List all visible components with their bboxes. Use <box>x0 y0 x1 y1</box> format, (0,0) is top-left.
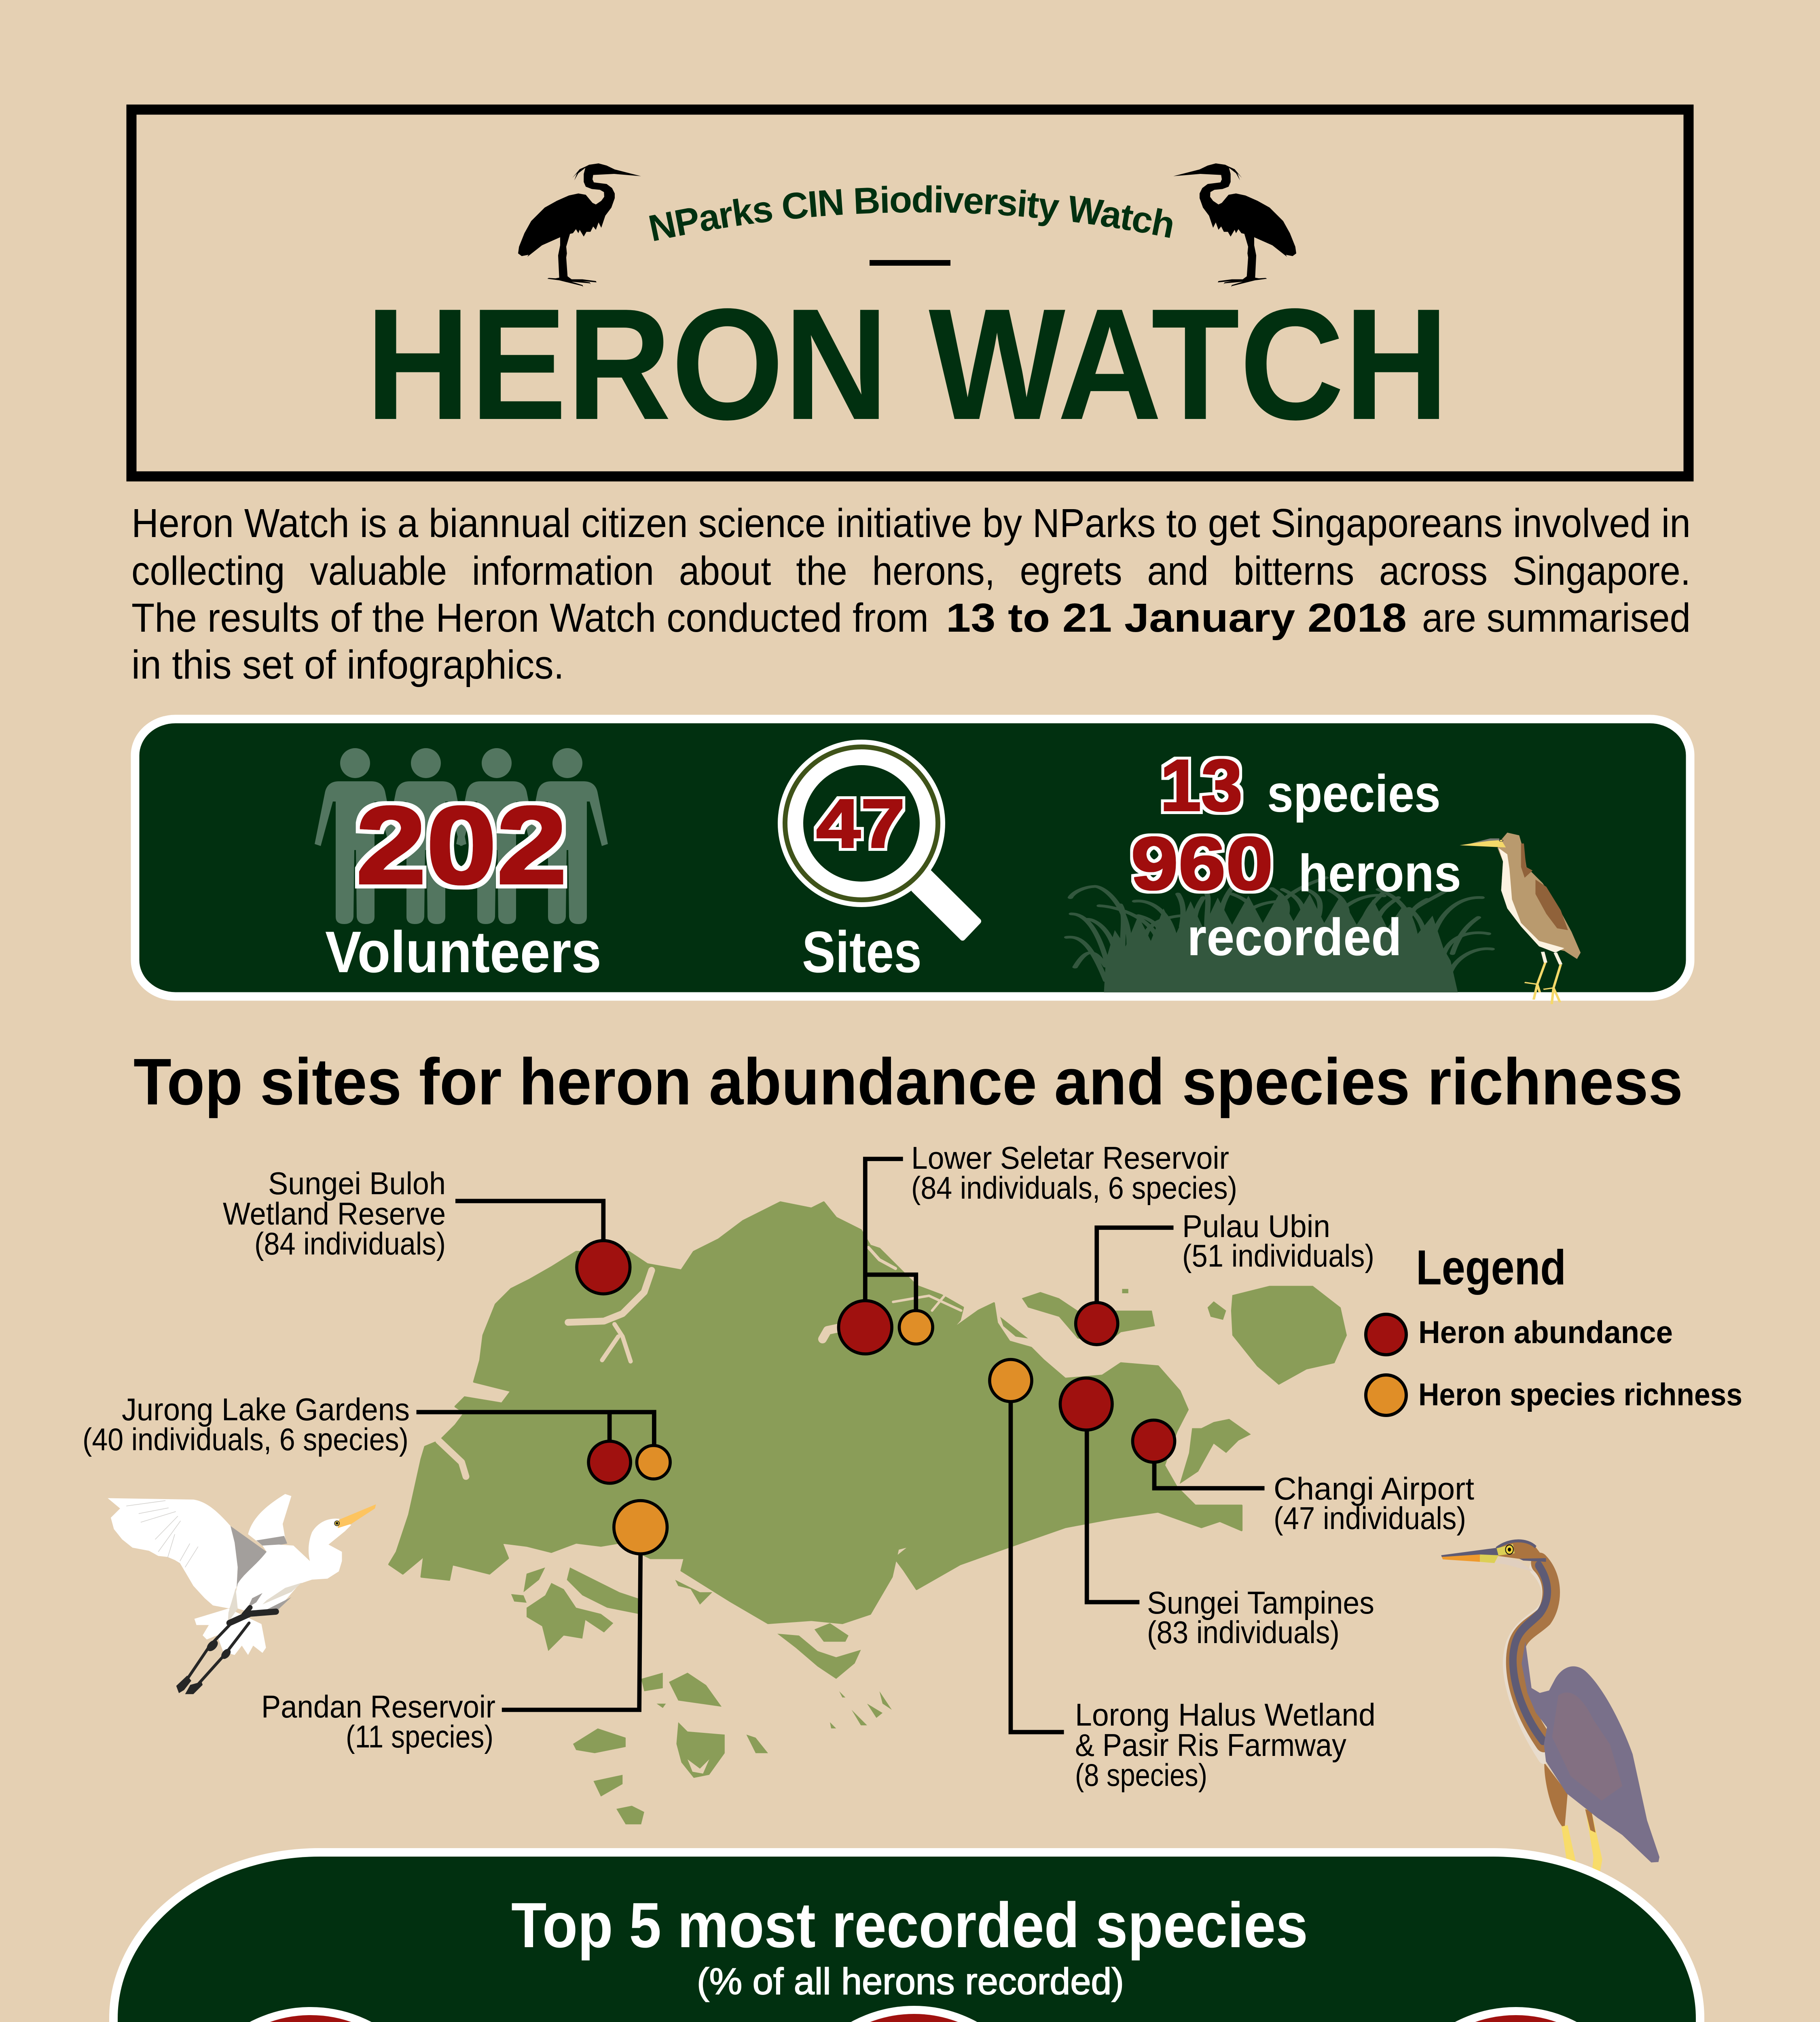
title dash <box>870 260 950 266</box>
icon: grass <box>1067 878 1492 992</box>
intro paragraph: collecting valuable information about the herons, egrets and bitterns across Singapore. <box>131 548 1691 594</box>
map of Singapore <box>389 1159 1347 1824</box>
label: Pulau Ubin: Pulau Ubin <box>1182 1208 1330 1244</box>
label: Sungei Buloh: Sungei Buloh <box>268 1165 446 1201</box>
map labels <box>83 1140 1474 1793</box>
sites number: 47 <box>816 785 905 862</box>
panel: key numbers <box>135 719 1690 1004</box>
icon: left heron silhouette <box>518 163 641 287</box>
illustration: flying egret <box>108 1494 376 1694</box>
heading: top sites: Top sites for heron abundance and species richness <box>133 1045 1683 1119</box>
label: Sungei Tampines <box>1147 1585 1374 1650</box>
map channels <box>439 1248 961 1476</box>
heading: top 5: Top 5 most recorded species <box>511 1890 1308 1961</box>
species label: species <box>1267 764 1441 823</box>
label: Lorong Halus: Lorong Halus Wetland <box>1075 1697 1376 1732</box>
label: Sungei Tampines: (83 individuals) <box>1147 1614 1340 1650</box>
label: Pandan Reservoir <box>261 1689 495 1754</box>
label: Changi Airport: (47 individuals) <box>1274 1500 1466 1536</box>
medallion: striated heron <box>851 2006 977 2022</box>
site markers <box>577 1241 1175 1554</box>
label: Lower Seletar <box>911 1140 1237 1206</box>
sites label: Sites <box>802 919 922 985</box>
label: Jurong Lake Gardens: Jurong Lake Gardens <box>122 1392 410 1427</box>
intro paragraph: in this set of infographics. <box>131 642 564 687</box>
Changi island strip <box>1180 1419 1251 1484</box>
label: Sungei Buloh: (84 individuals) <box>254 1226 446 1261</box>
intro paragraph: 13 to 21 January 2018 <box>946 595 1407 641</box>
legend: abundance: Heron abundance <box>1418 1314 1673 1350</box>
label: Lorong Halus <box>1075 1697 1376 1793</box>
icon: right heron silhouette <box>1173 163 1296 287</box>
label: Sungei Tampines: Sungei Tampines <box>1147 1585 1374 1620</box>
label: Lorong Halus: & Pasir Ris Farmway <box>1075 1727 1346 1763</box>
curved subtitle: NParks CIN Biodiversity Watch <box>645 179 1178 250</box>
icon: volunteers group <box>315 748 608 924</box>
intro paragraph: The results of the Heron Watch conducted from <box>131 595 929 641</box>
label: Pandan Reservoir: Pandan Reservoir <box>261 1689 495 1724</box>
label: Lower Seletar: (84 individuals, 6 species) <box>911 1170 1237 1206</box>
intro paragraph <box>131 501 1691 687</box>
title frame <box>131 110 1689 476</box>
subheading: (% of all herons recorded) <box>697 1961 1124 2002</box>
legend: richness: Heron species richness <box>1418 1377 1742 1412</box>
Pulau Tekong <box>1122 1286 1347 1385</box>
icon: magnifying glass <box>778 740 978 938</box>
legend title: Legend <box>1416 1240 1566 1295</box>
legend <box>1366 1240 1742 1415</box>
label: Jurong Lake Gardens: (40 individuals, 6 species) <box>83 1421 408 1457</box>
intro paragraph: are summarised <box>1422 595 1691 641</box>
main title: HERON WATCH <box>366 276 1449 453</box>
label: Pulau Ubin: (51 individuals) <box>1182 1238 1374 1273</box>
connector lines <box>417 1159 1265 1732</box>
panel: top 5 species <box>118 1857 1696 2022</box>
herons number: 960 <box>1131 822 1273 905</box>
title block <box>131 110 1689 476</box>
medallion: little egret <box>250 2007 371 2022</box>
intro paragraph: Heron Watch is a biannual citizen science initiative by NParks to get Singaporeans involved in <box>131 501 1691 546</box>
southern islands <box>511 1567 892 1824</box>
Pulau Ubin <box>1022 1292 1155 1345</box>
label: Pandan Reservoir: (11 species) <box>346 1719 493 1754</box>
label: Changi Airport: Changi Airport <box>1274 1471 1474 1506</box>
Coney island <box>1000 1317 1028 1339</box>
label: Changi Airport <box>1274 1471 1474 1536</box>
label: Pulau Ubin <box>1182 1208 1374 1273</box>
volunteers label: Volunteers <box>325 919 601 985</box>
label: Lorong Halus: (8 species) <box>1075 1757 1207 1793</box>
volunteers number: 202 <box>356 784 567 907</box>
label: Sungei Buloh <box>223 1165 446 1261</box>
icon: bittern <box>1460 833 1581 1004</box>
recorded label: recorded <box>1187 907 1402 967</box>
label: Lower Seletar: Lower Seletar Reservoir <box>911 1140 1229 1176</box>
medallion: purple heron <box>1455 2007 1577 2022</box>
label: Jurong Lake Gardens <box>83 1392 410 1457</box>
herons label: herons <box>1298 844 1461 903</box>
illustration: purple heron <box>1441 1541 1659 1879</box>
label: Sungei Buloh: Wetland Reserve <box>223 1196 446 1231</box>
species number: 13 <box>1160 745 1242 826</box>
